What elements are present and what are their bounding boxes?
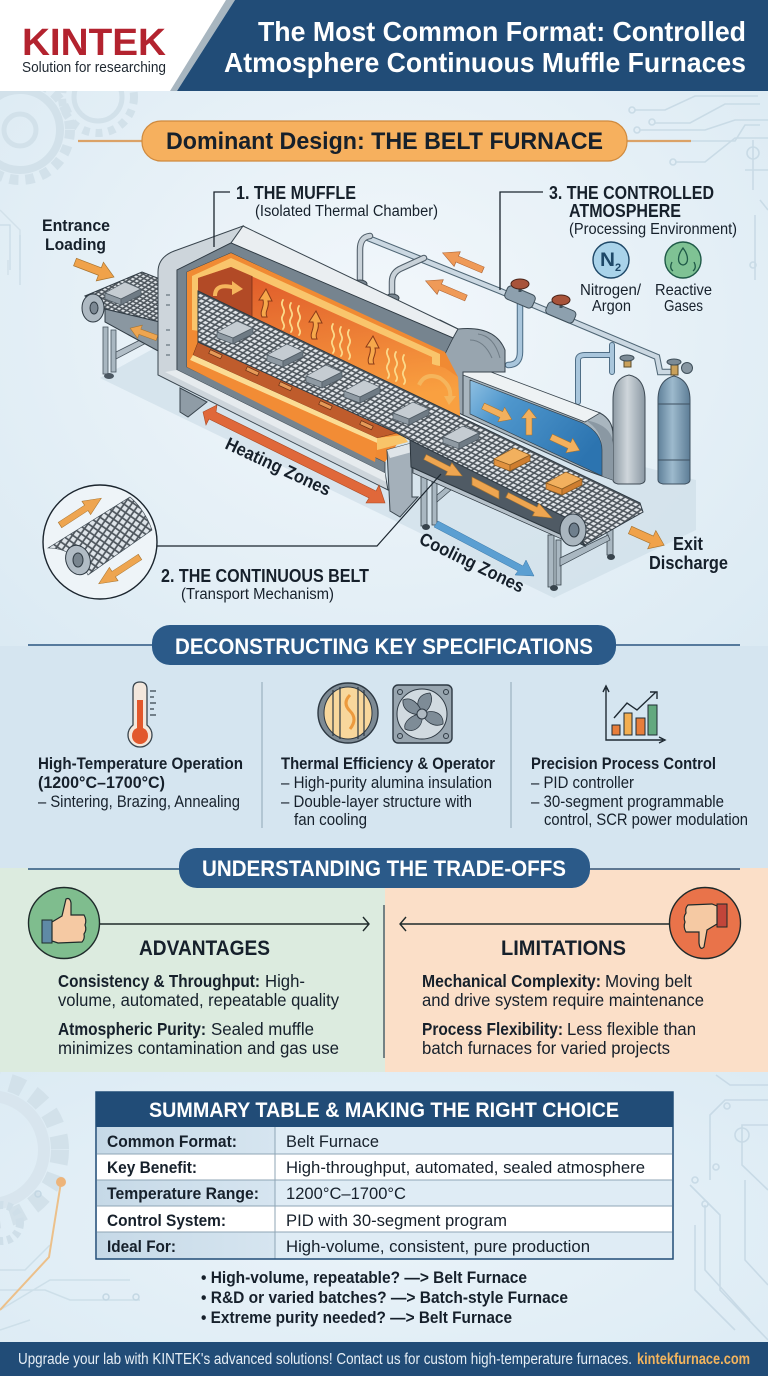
panel: limitations: [385, 868, 768, 1072]
label: reactive gases: Gases: [664, 298, 703, 315]
valves: [503, 279, 692, 375]
text: consistency: High-: [265, 971, 305, 991]
conveyor belt: [198, 291, 643, 545]
label: nitrogen argon: [580, 282, 642, 315]
label: reactive gases: Reactive: [655, 282, 712, 299]
icon: thumbs down: [670, 888, 740, 958]
inner wall: [198, 267, 460, 417]
specifications heading: DECONSTRUCTING KEY SPECIFICATIONS: [175, 634, 593, 659]
row: key benefit: [107, 1158, 645, 1177]
table title: SUMMARY TABLE & MAKING THE RIGHT CHOICE: [149, 1099, 619, 1122]
row: control system: [107, 1211, 507, 1230]
text: thermal efficiency: fan cooling: [294, 810, 367, 829]
row: ideal for: Ideal For:: [107, 1237, 176, 1256]
text: process flexibility: batch furnaces for varied projects: [422, 1038, 670, 1058]
text: thermal efficiency: – High-purity alumina insulation: [281, 773, 492, 792]
label: continuous belt: (Transport Mechanism): [181, 586, 334, 603]
text: purity: Sealed muffle: [211, 1019, 314, 1039]
icon: insulation cross section: [318, 683, 378, 743]
section heading: dominant design: [78, 121, 691, 161]
frame face: [158, 226, 388, 490]
label: nitrogen argon: Argon: [592, 298, 631, 315]
text: thermal efficiency: [281, 754, 495, 829]
muffle housing: [158, 226, 505, 517]
label: cooling zones: Cooling Zones: [416, 529, 527, 597]
header banner: [0, 0, 768, 91]
logo panel: [0, 0, 235, 91]
belt direction arrows: [422, 451, 555, 524]
label: controlled atmosphere: ATMOSPHERE: [569, 201, 681, 221]
arrow: heating zones: [203, 405, 385, 503]
text: purity: Atmospheric Purity:: [58, 1019, 206, 1039]
row: temperature range: 1200°C–1700°C: [286, 1184, 406, 1203]
exit conveyor side: [410, 440, 585, 546]
roof: [231, 226, 458, 338]
heat squiggles: [282, 300, 405, 384]
gas cylinders: [353, 236, 692, 484]
slanted divider: [170, 0, 235, 91]
text: high temperature: (1200°C–1700°C): [38, 773, 165, 792]
cooling housing: [463, 363, 613, 480]
cylinder: silver: [613, 375, 645, 484]
exit roller: [560, 514, 586, 546]
background decoration: circuit top right: [0, 96, 768, 285]
diagram: belt furnace: [43, 192, 696, 599]
section heading: trade-offs: [28, 848, 740, 888]
decision list: • Extreme purity needed? —> Belt Furnace: [201, 1308, 512, 1327]
label: entrance: Entrance: [42, 216, 110, 235]
icon: thermometer: [128, 682, 156, 747]
footer: [0, 1342, 768, 1376]
label: controlled atmosphere: [549, 183, 737, 238]
text: mechanical complexity: Mechanical Complexity:: [422, 971, 601, 991]
section heading: trade-offs: UNDERSTANDING THE TRADE-OFFS: [202, 856, 566, 881]
leader: belt: [157, 474, 441, 546]
arrow: advantages: [100, 917, 369, 931]
text: mechanical complexity: [422, 971, 704, 1010]
label: exit: Discharge: [649, 553, 728, 573]
entrance conveyor: [82, 272, 160, 379]
label: the muffle: (Isolated Thermal Chamber): [255, 203, 438, 220]
logo tagline: Solution for researching: [22, 59, 166, 76]
heat chamber: [187, 253, 460, 462]
leader: atmosphere: [500, 192, 543, 290]
text: high temperature: [38, 754, 243, 811]
exit conveyor support: [421, 468, 615, 591]
lower chamber strip: [193, 342, 397, 438]
label: controlled atmosphere: 3. THE CONTROLLED: [549, 183, 714, 203]
panel divider: [383, 905, 385, 1058]
dark end panel: [198, 267, 252, 318]
curved arrows: [215, 286, 450, 398]
table title: [96, 1092, 673, 1127]
label: exit: [649, 534, 728, 573]
text: thermal efficiency: Thermal Efficiency & Operator: [281, 754, 495, 773]
row: control system: PID with 30-segment program: [286, 1211, 507, 1230]
text: purity: minimizes contamination and gas use: [58, 1038, 339, 1058]
background decoration: gears top left: [0, 61, 134, 275]
text: high temperature: High-Temperature Operation: [38, 754, 243, 773]
row: temperature range: [107, 1184, 406, 1203]
text: thermal efficiency: – Double-layer structure with: [281, 792, 472, 811]
text: mechanical complexity: Moving belt: [605, 971, 692, 991]
up arrows: [259, 289, 379, 364]
text: process flexibility: Less flexible than: [567, 1019, 696, 1039]
table row backgrounds: [96, 1092, 673, 1259]
panel: advantages: [0, 868, 385, 1072]
arrow: cooling zones: [434, 521, 534, 576]
text: mechanical complexity: and drive system require maintenance: [422, 990, 704, 1010]
text: process flexibility: [422, 1019, 696, 1058]
background decoration: gears and circuit bottom left: [0, 1080, 140, 1330]
row: common format: Belt Furnace: [286, 1132, 379, 1151]
title line one: The Most Common Format: Controlled: [258, 16, 746, 47]
row: ideal for: [107, 1237, 590, 1256]
text: consistency: volume, automated, repeatable quality: [58, 990, 339, 1010]
control marks: [166, 295, 170, 355]
grey inner band: [177, 243, 453, 473]
text: precision control: [531, 754, 748, 829]
arrow: limitations: [400, 917, 669, 931]
section heading: dominant design: Dominant Design: THE BELT FURNACE: [166, 128, 603, 155]
icon: thumbs up: [28, 888, 100, 958]
icon: process chart: [603, 686, 665, 743]
pipe flanges: [353, 280, 399, 302]
inset: belt detail: [43, 485, 157, 599]
row: key benefit: High-throughput, automated, sealed atmosphere: [286, 1158, 645, 1177]
title band: [177, 0, 768, 91]
KINTEK logo text: KINTEK: [22, 22, 167, 64]
row: common format: [107, 1132, 379, 1151]
decision list: • High-volume, repeatable? —> Belt Furnace: [201, 1268, 527, 1287]
text: process flexibility: Process Flexibility:: [422, 1019, 563, 1039]
heater slots: [209, 350, 373, 430]
label: the muffle: 1. THE MUFFLE: [236, 183, 356, 203]
decision list: [201, 1268, 568, 1327]
text: precision control: – 30-segment programmable: [531, 792, 724, 811]
front legs: [180, 388, 207, 417]
row: key benefit: Key Benefit:: [107, 1158, 197, 1177]
icon: nitrogen: [593, 242, 629, 278]
cylinder: blue: [658, 376, 690, 484]
advantages heading: ADVANTAGES: [139, 937, 270, 960]
row: ideal for: High-volume, consistent, pure production: [286, 1237, 590, 1256]
text: consistency: [58, 971, 339, 1010]
background decoration: circuit bottom right: [690, 1075, 768, 1340]
summary table: [96, 1092, 673, 1259]
panel: key specifications: [0, 625, 768, 869]
limitations heading: LIMITATIONS: [501, 937, 626, 960]
label: continuous belt: [161, 566, 369, 603]
cooling airflow arrows: [480, 399, 583, 458]
footer: Upgrade your lab with KINTEK's advanced solutions! Contact us for custom high-temperature furnaces.: [18, 1351, 632, 1368]
title line two: Atmosphere Continuous Muffle Furnaces: [224, 47, 746, 78]
label: the muffle: [236, 183, 438, 220]
label: reactive gases: [655, 282, 712, 315]
label: heating zones: Heating Zones: [222, 433, 334, 500]
lower frame highlight: [165, 370, 386, 482]
arrows: supply gas: [422, 245, 486, 305]
leader: muffle: [214, 192, 230, 247]
label: controlled atmosphere: (Processing Environment): [569, 221, 737, 238]
label: continuous belt: 2. THE CONTINUOUS BELT: [161, 566, 369, 586]
row: common format: Common Format:: [107, 1132, 237, 1151]
row: control system: Control System:: [107, 1211, 226, 1230]
label: entrance: Loading: [45, 235, 106, 254]
arrow: entrance: [71, 253, 118, 286]
specifications heading: [28, 625, 740, 665]
text: precision control: – PID controller: [531, 773, 634, 792]
workpieces: orange: [494, 448, 582, 495]
icon: nitrogen: N: [600, 250, 615, 271]
text: high temperature: – Sintering, Brazing, Annealing: [38, 792, 240, 811]
workpieces: grey: [217, 321, 479, 449]
ground shadow: [100, 345, 696, 598]
label: nitrogen argon: Nitrogen/: [580, 282, 642, 299]
arrow: exit: [626, 521, 668, 554]
text: consistency: Consistency & Throughput:: [58, 971, 260, 991]
column dividers: [262, 682, 511, 828]
hot end cap: [430, 320, 505, 415]
text: precision control: Precision Process Control: [531, 754, 716, 773]
label: exit: Exit: [673, 534, 703, 554]
icon: nitrogen: 2: [615, 262, 621, 274]
label: entrance: [42, 216, 110, 254]
row: temperature range: Temperature Range:: [107, 1184, 259, 1203]
text: purity: [58, 1019, 339, 1058]
icon: reactive gases: [665, 242, 701, 278]
decision list: • R&D or varied batches? —> Batch-style Furnace: [201, 1288, 568, 1307]
icon: cooling fan: [393, 685, 452, 743]
supply pipes: [360, 236, 672, 402]
